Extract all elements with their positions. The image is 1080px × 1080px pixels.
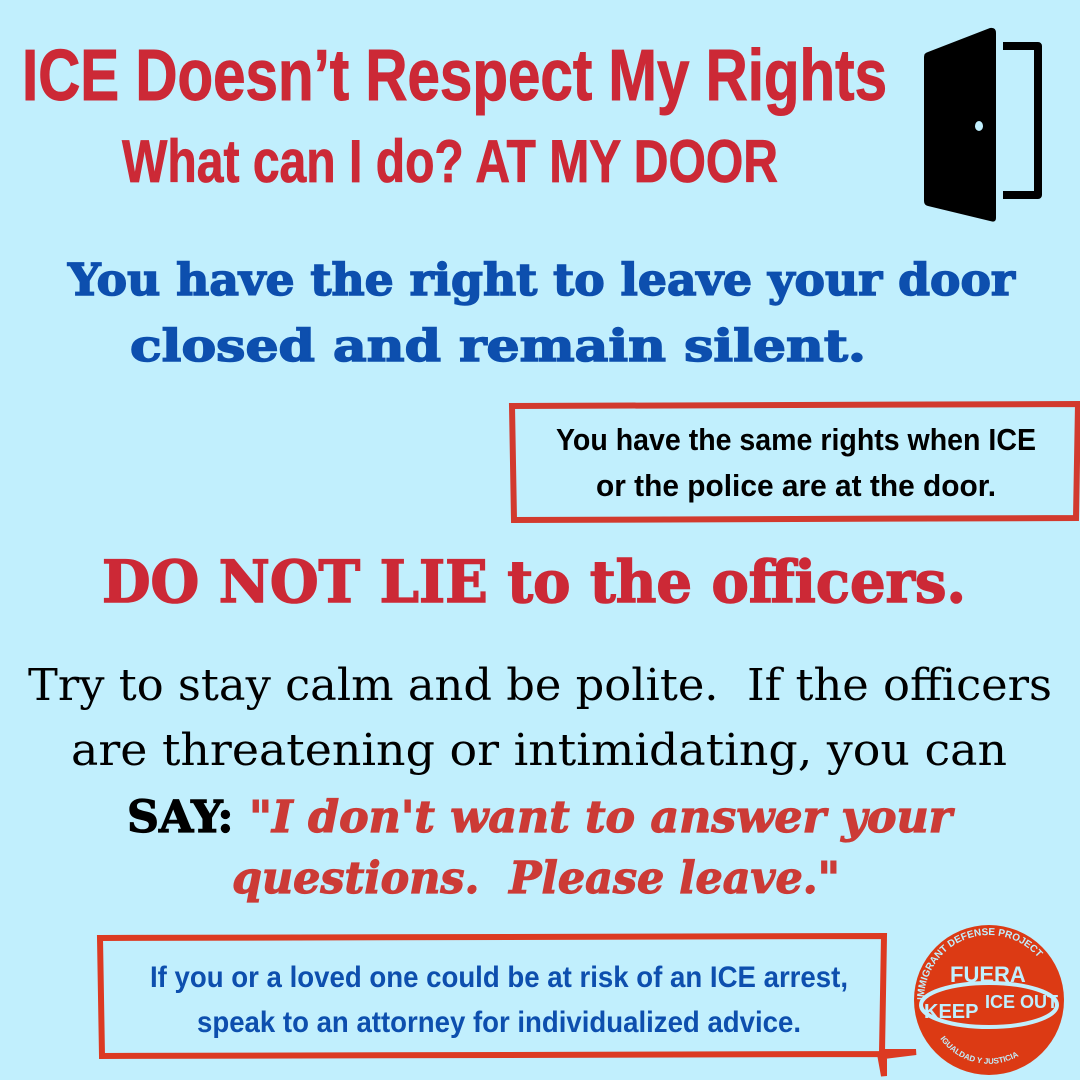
advice text: Try to stay calm and be polite. If the officers — [28, 660, 1052, 711]
logo: Immigrant Defense Project: IMMIGRANT DEFENSE PROJECT — [917, 928, 1044, 1000]
callout: same rights — [512, 404, 1078, 520]
callout: attorney — [100, 936, 916, 1076]
blue statement: You have the right to leave your door — [67, 255, 1016, 306]
icon: open door — [924, 28, 1038, 222]
blue statement — [67, 255, 1016, 372]
advice text: are threatening or intimidating, you can — [71, 725, 1007, 776]
callout: attorney: If you or a loved one could be at risk of an ICE arrest, — [150, 961, 848, 994]
logo: Immigrant Defense Project: FUERA — [950, 962, 1026, 987]
subtitle: What can I do? AT MY DOOR — [122, 128, 778, 195]
callout: attorney: speak to an attorney for individualized advice. — [197, 1006, 801, 1039]
blue statement: closed and remain silent. — [130, 321, 866, 372]
advice text: questions. Please leave." — [232, 853, 840, 904]
advice text — [28, 660, 1052, 904]
advice text: SAY: "I don't want to answer your — [127, 792, 955, 843]
logo: Immigrant Defense Project: KEEP — [924, 1001, 978, 1023]
title: ICE Doesn’t Respect My Rights — [22, 36, 887, 116]
logo: Immigrant Defense Project — [914, 925, 1064, 1075]
heading: do not lie: DO NOT LIE to the officers. — [102, 548, 966, 616]
callout: same rights: or the police are at the door. — [596, 468, 996, 503]
callout: same rights: You have the same rights when ICE — [556, 422, 1036, 457]
logo: Immigrant Defense Project: ICE OUT — [985, 992, 1058, 1012]
logo: Immigrant Defense Project: IGUALDAD Y JUSTICIA — [940, 1036, 1019, 1064]
